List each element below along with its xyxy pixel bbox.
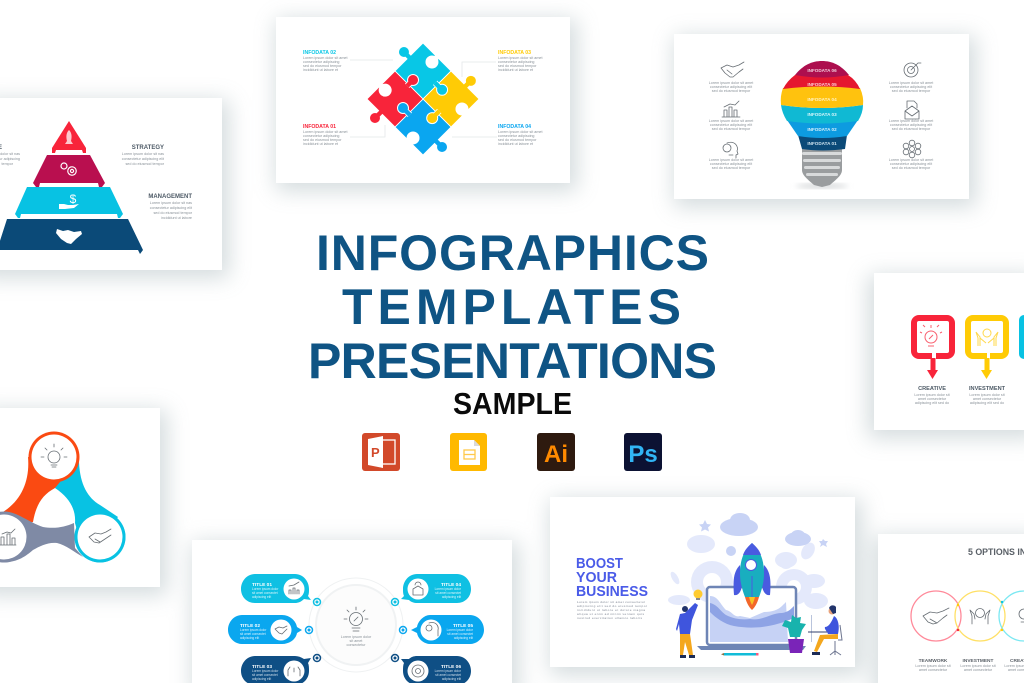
bulb shadow bbox=[796, 184, 848, 188]
label: management: consectetur adipiscing elit bbox=[150, 206, 192, 210]
label: teamwork: amet consectetur bbox=[919, 668, 948, 672]
pyramid level: handshake bbox=[0, 219, 143, 254]
icon: PowerPoint bbox=[362, 433, 400, 471]
bubble: title 03: sit amet consectet bbox=[252, 673, 278, 677]
heading: BOOST bbox=[576, 556, 623, 572]
label: creative: Lorem ipsum dolor sit bbox=[914, 393, 950, 397]
bubble: title 01: adipiscing elit bbox=[252, 595, 271, 599]
bubble: title 02: Lorem ipsum dolor bbox=[240, 628, 267, 632]
left icons and text: Lorem ipsum dolor sit amet bbox=[709, 119, 753, 123]
infodata 01: incididunt ut labore et bbox=[303, 142, 338, 146]
title: TEMPLATES bbox=[342, 279, 681, 335]
bubble: title 03: adipiscing elit bbox=[252, 677, 271, 681]
bubble: title 03: TITLE 03 bbox=[252, 664, 272, 670]
ring: creative bbox=[999, 591, 1024, 641]
left icons and text: consectetur adipiscing elit bbox=[710, 85, 752, 89]
left icons and text: sed do eiusmod tempor bbox=[712, 89, 751, 93]
layer 05 bbox=[783, 73, 860, 89]
icon: Photoshop: Ps bbox=[628, 441, 658, 468]
layer 01 bbox=[798, 135, 847, 150]
infodata 03: incididunt ut labore et bbox=[498, 68, 533, 72]
body text bbox=[577, 600, 647, 620]
left icons and text: sed do eiusmod tempor bbox=[712, 127, 751, 131]
left icons and text: consectetur adipiscing elit bbox=[710, 123, 752, 127]
heading bbox=[576, 556, 648, 600]
puzzle piece: red bbox=[356, 61, 433, 137]
label: investment: amet consectetur bbox=[973, 397, 1002, 401]
pyramid level: rocket bbox=[52, 121, 86, 153]
pyramid level: dollar hand bbox=[15, 187, 123, 218]
icon: Illustrator: Ai bbox=[544, 441, 568, 468]
layer 04 bbox=[781, 86, 863, 108]
left icons and text: consectetur adipiscing elit bbox=[710, 162, 752, 166]
infodata 04: incididunt ut labore et bbox=[498, 142, 533, 146]
panel: 5 options bbox=[878, 534, 1024, 683]
left icons and text: sed do eiusmod tempor bbox=[712, 166, 751, 170]
label: investment: adipiscing elit sed do bbox=[970, 401, 1004, 405]
infodata 02: sed do eiusmod tempor bbox=[303, 64, 342, 68]
label: creative: CREATIVE bbox=[918, 386, 946, 392]
infodata 01: consectetur adipiscing bbox=[303, 134, 340, 138]
label: investment bbox=[960, 658, 996, 672]
right icons and text: consectetur adipiscing elit bbox=[890, 162, 932, 166]
right icons and text: Lorem ipsum dolor sit amet bbox=[889, 119, 933, 123]
body text: Lorem ipsum dolor sit amet consectetur bbox=[577, 600, 645, 604]
puzzle piece: cyan bbox=[386, 33, 453, 99]
bubble: title 05: sit amet consectet bbox=[447, 632, 473, 636]
label: management: sed do eiusmod tempor bbox=[153, 211, 193, 215]
label: strategy: consectetur adipiscing elit bbox=[122, 157, 164, 161]
right icons and text: Lorem ipsum dolor sit amet bbox=[889, 81, 933, 85]
label: cut-off left bbox=[0, 145, 20, 166]
body text: nostrud exercitation ullamco laboris bbox=[577, 616, 642, 620]
bubble: title 04: sit amet consectet bbox=[435, 591, 461, 595]
ring: teamwork bbox=[911, 591, 961, 641]
bubble: title 03: Lorem ipsum dolor bbox=[252, 669, 279, 673]
label: teamwork: Lorem ipsum dolor sit bbox=[915, 664, 951, 668]
infodata 03: Lorem ipsum dolor sit amet bbox=[498, 56, 542, 60]
layer 03 bbox=[781, 105, 863, 124]
right icons and text: consectetur adipiscing elit bbox=[890, 85, 932, 89]
label: creative bbox=[914, 386, 950, 405]
infodata 03: consectetur adipiscing bbox=[498, 60, 534, 64]
pencil bbox=[721, 653, 758, 656]
panel: pyramid bbox=[0, 98, 222, 270]
ring junctions bbox=[957, 601, 1003, 631]
person at desk bbox=[808, 605, 842, 655]
right icons and text: sed do eiusmod tempor bbox=[892, 127, 931, 131]
title bbox=[308, 225, 717, 389]
puzzle piece: blue bbox=[393, 97, 462, 166]
bubble: title 05: TITLE 05 bbox=[453, 623, 473, 629]
layer 03: INFODATA 03 bbox=[807, 112, 837, 117]
label: cut-off left: tempor bbox=[2, 162, 14, 166]
left icons and text: Lorem ipsum dolor sit amet bbox=[709, 158, 753, 162]
label: strategy: sed do eiusmod tempor bbox=[125, 162, 165, 166]
heading: BUSINESS bbox=[576, 584, 648, 600]
cyan box bbox=[1019, 315, 1024, 359]
body text: aliqua ut enim ad minim veniam quis bbox=[577, 612, 644, 616]
layer 01: INFODATA 01 bbox=[807, 141, 837, 146]
infodata 02: Lorem ipsum dolor sit amet bbox=[303, 56, 347, 60]
center ring: Lorem ipsum dolor bbox=[341, 635, 372, 639]
infodata 04: sed do eiusmod tempor bbox=[498, 138, 537, 142]
bubble: title 06: sit amet consectet bbox=[435, 673, 461, 677]
bubble: title 01 bbox=[241, 574, 311, 603]
label: strategy: Lorem ipsum dolor sit nas bbox=[122, 152, 164, 156]
bubble: title 04: TITLE 04 bbox=[441, 582, 461, 588]
bubble: title 02: sit amet consectet bbox=[240, 632, 266, 636]
stars and pie bbox=[699, 520, 828, 556]
label: investment: Lorem ipsum dolor sit bbox=[960, 664, 996, 668]
pyramid level: gears bbox=[33, 155, 105, 187]
title: INFOGRAPHICS bbox=[316, 225, 709, 281]
label: strategy: STRATEGY bbox=[132, 145, 164, 151]
infodata 02: consectetur adipiscing bbox=[303, 60, 340, 64]
cyan link bbox=[55, 462, 126, 562]
center ring bbox=[309, 578, 403, 672]
bubble: title 01: TITLE 01 bbox=[252, 582, 272, 588]
label: management: incididunt ut labore bbox=[161, 216, 192, 220]
layer 06: INFODATA 06 bbox=[807, 68, 837, 73]
center ring: consectetur bbox=[346, 643, 366, 647]
label: investment: amet consectetur bbox=[964, 668, 993, 672]
left icons and text bbox=[709, 62, 753, 170]
pyramid level: dollar hand: $ bbox=[70, 192, 77, 206]
bubble: title 01: Lorem ipsum dolor bbox=[252, 587, 279, 591]
title: PRESENTATIONS bbox=[308, 333, 717, 389]
body text: adipiscing elit sed do eiusmod tempor bbox=[577, 604, 647, 608]
label: investment bbox=[969, 386, 1006, 405]
icon: Photoshop bbox=[624, 433, 662, 471]
center ring: sit amet bbox=[350, 639, 362, 643]
bulb screw base bbox=[802, 149, 842, 187]
label: investment: Lorem ipsum dolor sit bbox=[969, 393, 1005, 397]
subtitle: sample: SAMPLE bbox=[453, 386, 572, 421]
plant bbox=[782, 615, 806, 653]
bubble: title 05: Lorem ipsum dolor bbox=[447, 628, 474, 632]
gray circle icon bbox=[0, 514, 26, 560]
layer 02: INFODATA 02 bbox=[807, 127, 837, 132]
yellow box bbox=[968, 318, 1006, 379]
cloud top centre bbox=[720, 513, 811, 546]
bubble: title 01: sit amet consectet bbox=[252, 591, 278, 595]
label: teamwork: TEAMWORK bbox=[919, 658, 948, 664]
body text: incididunt ut labore et dolore magna bbox=[577, 608, 645, 612]
infodata 03 bbox=[498, 50, 542, 72]
bubble: title 02: adipiscing elit bbox=[240, 636, 259, 640]
laptop bbox=[697, 587, 806, 650]
bubble: title 06 bbox=[401, 656, 471, 683]
infodata 01: Lorem ipsum dolor sit amet bbox=[303, 130, 347, 134]
icon: PowerPoint: P bbox=[371, 445, 380, 460]
infodata 03: sed do eiusmod tempor bbox=[498, 64, 537, 68]
label: management: MANAGEMENT bbox=[148, 194, 192, 200]
bubble: title 04 bbox=[401, 574, 471, 603]
panel: light bulb bbox=[674, 34, 969, 199]
bubble: title 05: adipiscing elit bbox=[454, 636, 473, 640]
panel: arrows boxes bbox=[874, 273, 1024, 430]
layer 04: INFODATA 04 bbox=[807, 97, 837, 102]
ring: investment bbox=[955, 591, 1005, 641]
label: creative: adipiscing elit sed do bbox=[915, 401, 949, 405]
bubble: title 04: adipiscing elit bbox=[442, 595, 461, 599]
panel: three-way cycle bbox=[0, 408, 160, 587]
puzzle: four interlocking pieces bbox=[349, 26, 497, 173]
icon: Illustrator bbox=[537, 433, 575, 471]
background clouds and gears bbox=[668, 535, 828, 609]
label: investment: INVESTMENT bbox=[963, 658, 994, 664]
label: strategy bbox=[122, 145, 165, 166]
right icons and text: sed do eiusmod tempor bbox=[892, 89, 931, 93]
infodata 04: INFODATA 04 bbox=[498, 124, 531, 130]
bubble: title 06: adipiscing elit bbox=[442, 677, 461, 681]
icon: Google Slides bbox=[450, 433, 487, 471]
infodata 04 bbox=[498, 124, 542, 146]
infodata 02 bbox=[303, 50, 347, 72]
rocket bbox=[734, 543, 770, 610]
bubble: title 02 bbox=[228, 615, 302, 644]
infodata 01: sed do eiusmod tempor bbox=[303, 138, 342, 142]
label: management bbox=[148, 194, 193, 220]
infodata 01 bbox=[303, 124, 347, 146]
connector dots bbox=[306, 598, 406, 662]
red box bbox=[914, 318, 952, 379]
bubble: title 06: TITLE 06 bbox=[441, 664, 461, 670]
gray link bbox=[0, 512, 83, 562]
cyan circle redraw over gray bbox=[74, 512, 126, 562]
label: creative bbox=[1004, 658, 1024, 672]
puzzle piece: yellow bbox=[421, 60, 489, 129]
label: teamwork bbox=[915, 658, 951, 672]
panel: title bubbles bbox=[192, 540, 512, 683]
orange circle icon bbox=[32, 434, 76, 480]
infodata 04: consectetur adipiscing bbox=[498, 134, 534, 138]
bubble: title 03 bbox=[241, 656, 311, 683]
panel: boost your business bbox=[550, 497, 855, 667]
infodata 02: INFODATA 02 bbox=[303, 50, 336, 56]
bubble: title 02: TITLE 02 bbox=[240, 623, 260, 629]
infodata 04: Lorem ipsum dolor sit amet bbox=[498, 130, 542, 134]
infodata 03: INFODATA 03 bbox=[498, 50, 531, 56]
label: creative: amet consectetur bbox=[918, 397, 947, 401]
bubble: title 05 bbox=[411, 615, 484, 644]
infodata 02: incididunt ut labore et bbox=[303, 68, 338, 72]
layer 06 bbox=[795, 61, 849, 78]
layer 05: INFODATA 05 bbox=[807, 82, 837, 87]
person with lightbulb bbox=[676, 590, 702, 658]
right icons and text: sed do eiusmod tempor bbox=[892, 166, 931, 170]
right icons and text bbox=[889, 63, 933, 170]
orange link bbox=[0, 432, 80, 530]
left icons and text: Lorem ipsum dolor sit amet bbox=[709, 81, 753, 85]
layer 02 bbox=[787, 120, 858, 138]
right icons and text: Lorem ipsum dolor sit amet bbox=[889, 158, 933, 162]
panel: puzzle bbox=[276, 17, 570, 183]
heading: YOUR bbox=[576, 570, 618, 586]
infodata 01: INFODATA 01 bbox=[303, 124, 336, 130]
leader lines bbox=[350, 60, 497, 137]
label: management: Lorem ipsum dolor sit nas bbox=[150, 201, 192, 205]
right icons and text: consectetur adipiscing elit bbox=[890, 123, 932, 127]
label: investment: INVESTMENT bbox=[969, 386, 1006, 392]
bubble: title 04: Lorem ipsum dolor bbox=[435, 587, 462, 591]
bubble: title 06: Lorem ipsum dolor bbox=[435, 669, 462, 673]
